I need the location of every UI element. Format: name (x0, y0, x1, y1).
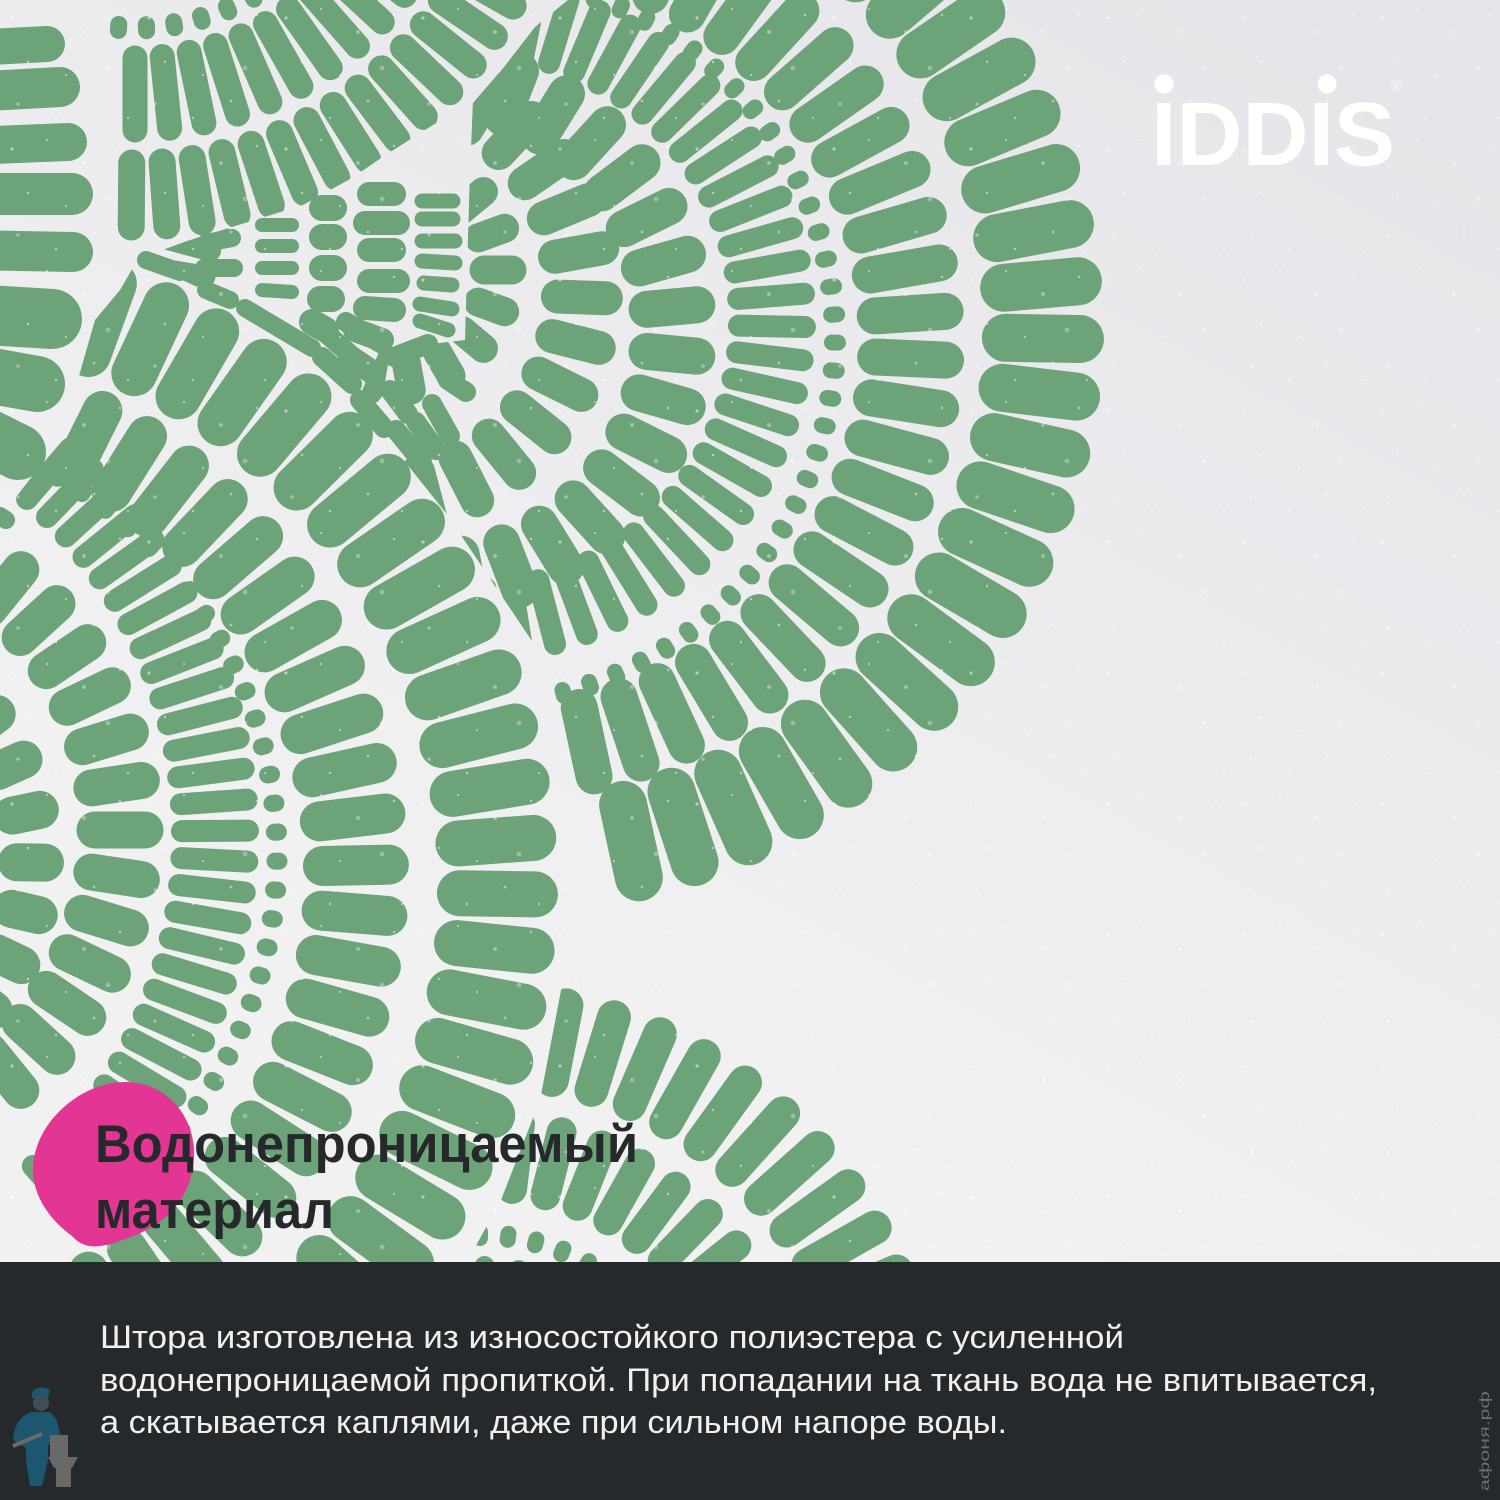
body text: а скатывается каплями, даже при сильном напоре воды. (100, 1404, 1007, 1440)
pattern: lower-right rosette (475, 988, 910, 1262)
heading (95, 1115, 638, 1240)
body text: Штора изготовлена из износостойкого полиэстера с усиленной (100, 1319, 1124, 1355)
dark footer panel (0, 1262, 1500, 1500)
pattern: lower-left rosette (0, 270, 558, 1262)
pattern: top rosette (110, 0, 527, 240)
pink accent blob (33, 1082, 194, 1246)
heading: материал (95, 1181, 334, 1240)
pattern: main rosette focus pills (146, 194, 466, 462)
brand logo: IDDIS: ® (1391, 78, 1402, 95)
watermark: афоня.рф (1476, 1391, 1492, 1491)
pattern: main rosette outer rings (164, 0, 1104, 902)
pattern: main rosette inner rings (362, 53, 716, 606)
body text (100, 1319, 1377, 1440)
icon: plumber with toilet (13, 1387, 78, 1487)
heading: Водонепроницаемый (95, 1115, 638, 1174)
brand logo: IDDIS: IDDIS (1151, 85, 1395, 185)
pattern: far-left rosette pills (0, 44, 73, 520)
body text: водонепроницаемой пропиткой. При попадании на ткань вода не впитывается, (100, 1362, 1377, 1398)
